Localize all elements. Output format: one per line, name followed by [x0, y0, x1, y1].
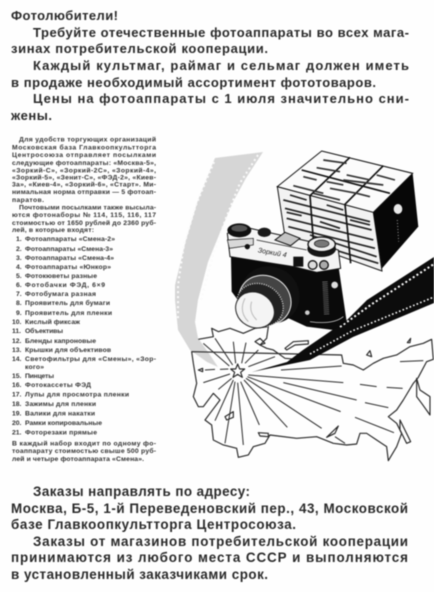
numbered list of items: Валики для накатки [25, 410, 95, 418]
numbered list of items: Фоторезаки прямые [25, 430, 97, 436]
address paragraph [11, 484, 408, 532]
numbered list of items: 10. [12, 319, 22, 326]
numbered list of items: Фотоаппараты «Юнкор» [25, 264, 111, 271]
numbered list of items: Фотокассеты ФЭД [25, 382, 91, 389]
address paragraph: Москва, Б-5, 1-й Переведеновский пер., 43, Московской [11, 501, 408, 516]
black film strip [252, 257, 434, 372]
orders paragraph: Заказы от магазинов потребительской кооперации [33, 534, 408, 549]
illustration: camera, box, film, map [175, 151, 434, 461]
lens [229, 255, 310, 335]
numbered list of items: Проявитель для пленки [25, 310, 112, 317]
small print intro: нимальная норма отправки — 5 фотоап- [12, 189, 156, 196]
address paragraph: Заказы направлять по адресу: [33, 484, 250, 499]
numbered list of items: 12. [12, 338, 22, 345]
numbered list of items: 6. [16, 282, 22, 289]
top text block [10, 8, 409, 123]
small print intro: ются фотонаборы № 114, 115, 116, 117 [12, 211, 156, 219]
numbered list of items: Бленды капроновые [25, 338, 96, 345]
small print intro: Центросоюза отправляет посылками [12, 152, 156, 159]
numbered list of items: Рамки копировальные [25, 420, 102, 427]
numbered list of items: Зажимы для пленки [25, 401, 96, 408]
numbered list of items: Проявитель для бумаги [25, 299, 110, 307]
numbered list of items: Пинцеты [25, 373, 54, 380]
distribution rays [203, 338, 423, 445]
numbered list of items: 18. [12, 401, 22, 408]
small print note: тоаппарату стоимостью свыше 500 руб- [12, 447, 156, 455]
heading: Фотолюбители! [11, 8, 118, 23]
right dial [307, 241, 336, 257]
hot shoe [275, 232, 300, 246]
numbered list of items: Объективы [25, 327, 63, 335]
numbered list of items: 3. [16, 255, 22, 262]
map islands and lakes [198, 338, 430, 443]
numbered list of items: 21. [12, 430, 22, 436]
small print intro: лей, в которые входят: [12, 226, 94, 234]
numbered list of items: Фотобачки ФЭД, 6×9 [25, 281, 105, 289]
numbered list of items: 9. [16, 310, 22, 317]
small print intro: 3а», «Киев-4», «Зоркий-6», «Старт». Ми- [12, 180, 156, 188]
camera body [231, 257, 347, 330]
numbered list of items: 1. [16, 236, 22, 243]
numbered list of items: Лупы для просмотра пленки [25, 392, 129, 398]
numbered list of items: Фотобумага разная [25, 290, 96, 298]
small print intro: Московская база Главкоопкультторга [12, 144, 156, 152]
numbered list of items: 2. [16, 246, 22, 253]
small print intro: Для удобств торгующих организаций [19, 136, 156, 144]
address paragraph: базе Главкоопкультторга Центросоюза. [11, 517, 296, 532]
star [231, 364, 245, 377]
bottom text block [11, 484, 408, 582]
numbered list of items [12, 236, 156, 436]
numbered list of items: 4. [16, 264, 22, 271]
small print intro: «Зоркий-С», «Зоркий-2С», «Зоркий-4», [12, 166, 156, 174]
numbered list of items: 14. [12, 356, 22, 363]
numbered list of items: Фотоаппараты «Смена-4» [25, 255, 114, 262]
numbered list of items: 19. [12, 410, 22, 418]
small print intro: следующие фотоаппараты: «Москва-5», [12, 160, 156, 167]
top paragraph 3: Цены на фотоаппараты с 1 июля значительно сни- [33, 91, 409, 106]
small print note [12, 440, 156, 463]
orders paragraph: в установленный заказчиками срок. [11, 567, 268, 582]
shutter knob [258, 228, 271, 237]
numbered list of items: 13. [12, 347, 22, 354]
orders paragraph: принимаются из любого места СССР и выполняются [11, 550, 408, 565]
numbered list of items: 17. [12, 392, 22, 398]
parcel box [277, 151, 418, 271]
numbered list of items: 15. [12, 373, 22, 380]
numbered list of items: Кислый фиксаж [25, 318, 80, 326]
small print note: лей и четыре фотоаппарата «Смена». [12, 455, 144, 463]
small print intro: паратов. [12, 197, 44, 204]
numbered list of items: 16. [12, 382, 22, 389]
top paragraph 3 [10, 91, 409, 123]
top paragraph 2: Каждый культмаг, раймаг и сельмаг должен иметь [33, 58, 409, 73]
top paragraph 1: зинах потребительской кооперации. [11, 41, 268, 56]
camera [227, 223, 347, 335]
top paragraph 3: жены. [10, 108, 52, 123]
small print intro: Почтовыми посылками также высыла- [19, 204, 156, 212]
top paragraph 1: Требуйте отечественные фотоаппараты во всех мага- [33, 25, 409, 40]
numbered list of items: Светофильтры для «Смены», «Зор- [25, 356, 156, 363]
small print note: В каждый набор входит по одному фо- [12, 440, 156, 448]
small print intro: стоимостью от 1650 рублей до 2360 руб- [12, 219, 156, 227]
map outline [192, 327, 433, 461]
grey film strip [175, 152, 263, 367]
numbered list of items: Фотокюветы разные [25, 273, 97, 280]
numbered list of items: Крышки для объективов [25, 346, 111, 354]
top paragraph 2: в продаже необходимый ассортимент фототоваров. [11, 75, 376, 90]
viewfinder windows [293, 257, 303, 267]
numbered list of items: кого» [25, 364, 44, 371]
camera top plate [227, 228, 341, 272]
parcel box, camera [227, 151, 418, 335]
map of the USSR [192, 327, 433, 461]
numbered list of items: 11. [12, 328, 21, 335]
camera model name: Зоркий 4 [257, 246, 287, 259]
small print intro [12, 136, 156, 234]
numbered list of items: 5. [16, 273, 22, 280]
small print intro: «Зоркий-5», «Зенит-С», «ФЭД-2», «Киев- [12, 174, 156, 182]
numbered list of items: 20. [12, 420, 22, 427]
numbered list of items: Фотоаппараты «Смена-3» [25, 246, 113, 253]
left dial [227, 223, 251, 237]
top paragraph 2 [11, 58, 409, 90]
orders paragraph [11, 534, 408, 582]
numbered list of items: Фотоаппараты «Смена-2» [25, 236, 115, 243]
numbered list of items: 8. [16, 300, 22, 307]
top paragraph 1 [11, 25, 409, 56]
numbered list of items: 7. [16, 291, 22, 298]
